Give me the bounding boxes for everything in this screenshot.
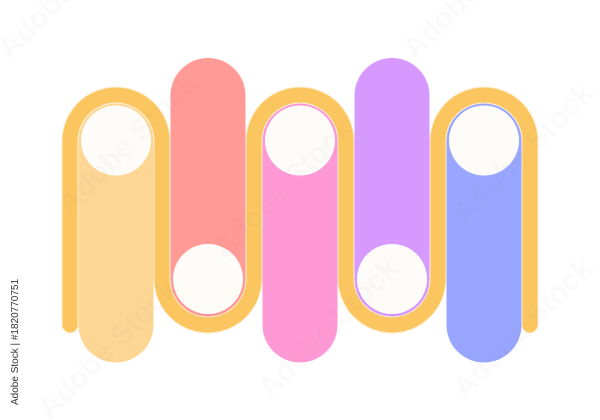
pill 2: red: [170, 58, 246, 317]
side credit text: Adobe Stock | #1820770751: [10, 279, 21, 405]
pill 3: pink: [262, 104, 338, 362]
pill 4: purple: [354, 58, 430, 317]
watermarks: Adobe Stock: [207, 112, 360, 265]
watermarks: Adobe Stock: [447, 77, 600, 230]
circle 3: [265, 106, 335, 176]
winding orange ribbon: [70, 95, 530, 325]
circle 5: [449, 106, 519, 176]
watermarks: Adobe Stock: [447, 252, 600, 405]
circle 1: [81, 106, 151, 176]
circle 4: [357, 244, 427, 314]
circle 2: [173, 244, 243, 314]
watermarks: Adobe Stock: [252, 252, 405, 405]
watermarks: Adobe Stock: [52, 67, 205, 220]
pill 1: peach: [78, 104, 154, 362]
pill 5: blue: [446, 104, 522, 362]
